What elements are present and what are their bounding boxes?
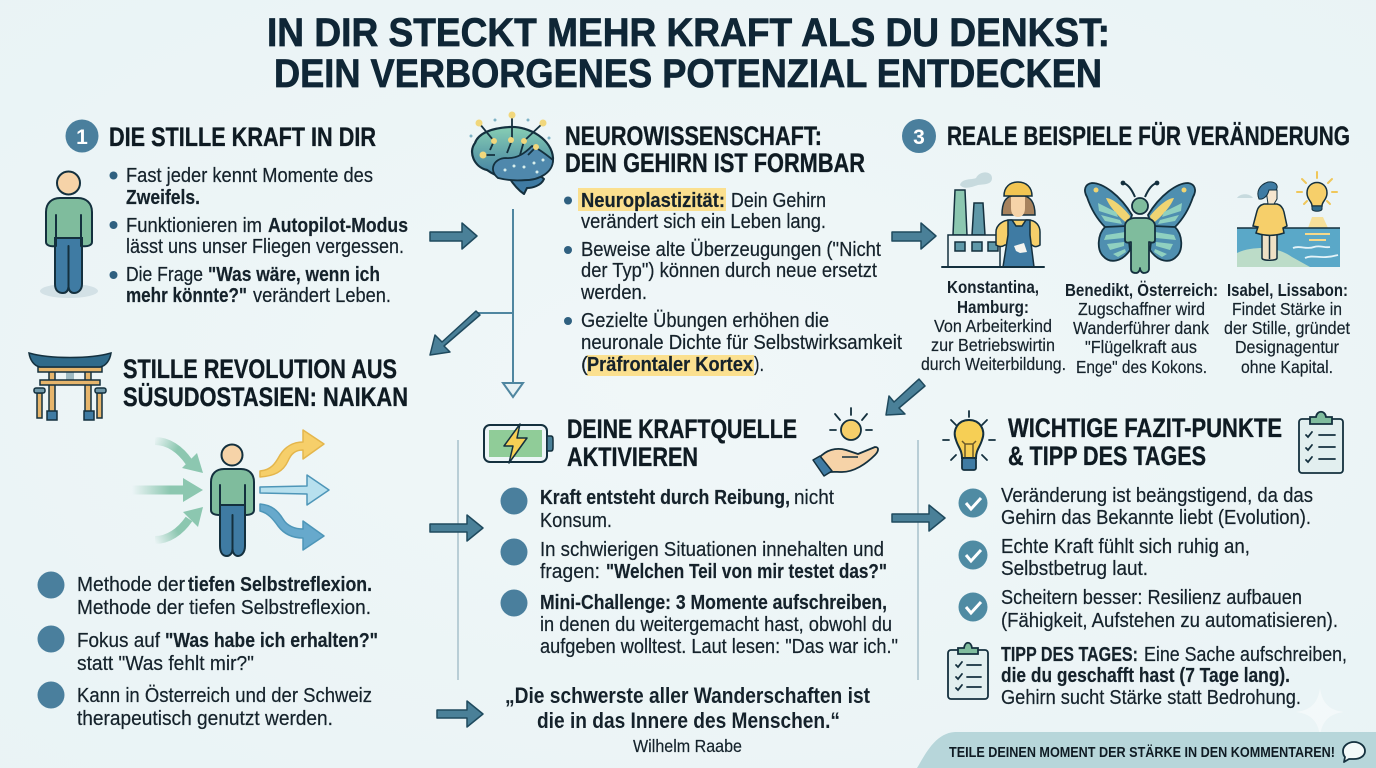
text: benedikt: Enge" des Kokons.	[1076, 357, 1207, 377]
bullet list: kraftquelle: Kraft entsteht durch Reibung,	[540, 486, 790, 509]
icon: brain	[470, 112, 553, 194]
bullet list: stille kraft: lässt uns unser Fliegen vergessen.	[126, 235, 404, 258]
bullet list: stille kraft: Autopilot-Modus	[268, 214, 408, 237]
bullet list: stille kraft: verändert Leben.	[253, 284, 391, 307]
bullet list: neuroplastizitaet: ).	[754, 353, 764, 376]
text: konstantina: zur Betriebswirtin	[931, 335, 1055, 355]
sparkle	[1296, 688, 1344, 736]
arrow: brain down to kraftquelle with branch to naikan	[430, 209, 523, 397]
bullet list: naikan: Methode der	[77, 573, 185, 596]
heading: deine kraftquelle: AKTIVIEREN	[567, 442, 698, 472]
icon: outgoing arrows	[260, 430, 329, 550]
text: tipp des tages: Gehirn sucht Stärke statt Bedrohung.	[1001, 686, 1301, 709]
bullet list: kraftquelle: nicht	[794, 486, 834, 509]
heading: deine kraftquelle	[567, 414, 797, 472]
panel: reale beispiele	[902, 119, 1350, 377]
icon: check 3	[958, 592, 988, 622]
icon: torii gate	[29, 353, 111, 420]
quote: wilhelm raabe	[505, 683, 871, 756]
heading: die stille kraft in dir: DIE STILLE KRAFT IN DIR	[109, 122, 376, 152]
heading: neurowissenschaft: NEUROWISSENSCHAFT:	[565, 121, 822, 151]
text: isabel: Findet Stärke in	[1232, 299, 1342, 319]
bullet list: kraftquelle: Mini-Challenge: 3 Momente aufschreiben,	[540, 591, 887, 614]
bullet list: neuroplastizitaet: der Typ") können durch neue ersetzt	[581, 259, 877, 282]
bullet list: naikan: Kann in Österreich und der Schweiz	[77, 684, 372, 707]
arrow: naikan to kraftquelle	[430, 515, 483, 541]
text: tipp des tages: TIPP DES TAGES:	[1001, 643, 1138, 666]
text: benedikt: Benedikt, Österreich:	[1065, 280, 1218, 300]
text: konstantina: Von Arbeiterkind	[934, 316, 1052, 336]
icon: standing person	[40, 172, 98, 298]
text: isabel: Designagentur	[1235, 337, 1339, 357]
panel: neurowissenschaft	[470, 112, 902, 376]
quote: wilhelm raabe: „Die schwerste aller Wanderschaften ist	[505, 683, 871, 708]
text: fazit points: Selbstbetrug laut.	[1001, 557, 1148, 580]
number badge 3	[902, 119, 936, 153]
bullet list: kraftquelle: "Welchen Teil von mir testet das?"	[606, 560, 887, 583]
bullet list: neuroplastizitaet: neuronale Dichte für Selbstwirksamkeit	[581, 331, 902, 354]
icon: butterfly person	[1085, 182, 1195, 273]
bullet list: naikan: statt "Was fehlt mir?"	[77, 652, 254, 675]
text: isabel: Isabel, Lissabon:	[1227, 280, 1348, 300]
text: fazit points: Gehirn das Bekannte liebt (Evolution).	[1001, 506, 1311, 529]
bullet list: kraftquelle: aufgeben wolltest. Laut lesen: "Das war ich."	[540, 635, 898, 658]
icon: woman by the sea with light bulb	[1237, 172, 1340, 267]
bullet list: naikan	[38, 572, 378, 730]
text: konstantina: durch Weiterbildung.	[921, 354, 1066, 374]
heading: wichtige fazit-punkte: & TIPP DES TAGES	[1008, 441, 1206, 471]
arrow: neurowissenschaft to beispiele	[892, 223, 936, 249]
icon: factory and worker	[942, 172, 1044, 267]
bullet list: stille kraft	[110, 164, 408, 307]
panel: kraftquelle	[484, 408, 898, 756]
arrow: kraftquelle to fazit	[892, 505, 945, 531]
text: benedikt: Zugschaffner wird	[1078, 299, 1205, 319]
icon: speech bubble	[1343, 742, 1365, 762]
text: tipp des tages: die du geschafft hast (7 Tage lang).	[1001, 664, 1290, 687]
heading: stille revolution: STILLE REVOLUTION AUS	[123, 354, 397, 384]
bullet list: kraftquelle: in denen du weitergemacht hast, obwohl du	[540, 613, 892, 636]
number badge 3: 3	[913, 126, 925, 149]
bullet list: neuroplastizitaet: Neuroplastizität:	[581, 189, 725, 212]
icon: battery with lightning	[484, 424, 553, 463]
bullet list: neuroplastizitaet: werden.	[580, 281, 647, 304]
footer band	[917, 732, 1376, 768]
bullet list: neuroplastizitaet: verändert sich ein Leben lang.	[581, 210, 826, 233]
bullet list: stille kraft: Funktionieren im	[126, 214, 262, 237]
bullet list: kraftquelle: In schwierigen Situationen innehalten und	[540, 538, 884, 561]
heading: deine kraftquelle: DEINE KRAFTQUELLE	[567, 414, 797, 444]
title: DEIN VERBORGENES POTENZIAL ENTDECKEN	[274, 52, 1102, 96]
quote: wilhelm raabe: Wilhelm Raabe	[633, 736, 742, 756]
heading: wichtige fazit-punkte	[1008, 413, 1282, 471]
icon: clipboard small	[948, 643, 988, 699]
text: konstantina	[921, 277, 1066, 374]
text: isabel: der Stille, gründet	[1224, 318, 1350, 338]
icon: check 2	[958, 540, 988, 570]
bullet list: kraftquelle: Konsum.	[540, 509, 612, 532]
text: fazit points: Echte Kraft fühlt sich ruhig an,	[1001, 535, 1250, 558]
number badge 1: 1	[76, 126, 88, 149]
heading: wichtige fazit-punkte: WICHTIGE FAZIT-PUNKTE	[1008, 413, 1282, 443]
heading: stille revolution: SÜSUDOSTASIEN: NAIKAN	[123, 382, 408, 412]
bullet list: neuroplastizitaet: Präfrontaler Kortex	[587, 353, 754, 376]
icon: person receiving	[211, 444, 254, 556]
panel: naikan	[29, 353, 408, 730]
bullet list: naikan: therapeutisch genutzt werden.	[77, 707, 333, 730]
panel: fazit	[917, 411, 1376, 768]
heading: neurowissenschaft: DEIN GEHIRN IST FORMBAR	[565, 148, 865, 178]
divider	[458, 440, 918, 680]
bullet list: neuroplastizitaet	[564, 188, 902, 376]
arrow: beispiele to kraftquelle	[886, 379, 925, 415]
icon: light bulb	[943, 411, 995, 470]
bullet list: kraftquelle	[500, 486, 898, 658]
icon: check 1	[958, 488, 988, 518]
title	[267, 11, 1110, 96]
icon: incoming arrows	[132, 441, 203, 540]
text: tipp des tages: Eine Sache aufschreiben,	[1144, 643, 1347, 666]
text: isabel	[1224, 280, 1350, 377]
bullet list: neuroplastizitaet: Gezielte Übungen erhöhen die	[581, 309, 829, 332]
check list: fazit	[958, 484, 1338, 632]
icon: hand holding sun	[813, 408, 878, 476]
panel: die stille kraft	[40, 120, 408, 307]
title: IN DIR STECKT MEHR KRAFT ALS DU DENKST:	[267, 11, 1110, 55]
quote: wilhelm raabe: die in das Innere des Menschen.“	[537, 708, 840, 733]
text: benedikt: "Flügelkraft aus	[1085, 337, 1197, 357]
text: fazit points: (Fähigkeit, Aufstehen zu automatisieren).	[1001, 609, 1338, 632]
text: tipp des tages	[1001, 643, 1347, 709]
bullet list: naikan: Fokus auf	[77, 629, 160, 652]
bullet list: stille kraft: Die Frage	[126, 263, 203, 286]
icon: clipboard	[1299, 412, 1343, 473]
text: konstantina: Hamburg:	[957, 297, 1029, 317]
heading: neurowissenschaft	[565, 121, 865, 178]
arrow: naikan to quote	[437, 701, 483, 727]
bullet list: stille kraft: Fast jeder kennt Momente des	[126, 164, 373, 187]
bullet list: naikan: tiefen Selbstreflexion.	[188, 573, 372, 596]
arrow: stille kraft to neurowissenschaft	[430, 223, 477, 249]
text: benedikt	[1065, 280, 1218, 377]
text: fazit points: Veränderung ist beängstigend, da das	[1001, 484, 1313, 507]
text: konstantina: Konstantina,	[947, 277, 1039, 297]
number badge 1	[66, 120, 98, 152]
bullet list: stille kraft: Zweifels.	[126, 186, 200, 209]
bullet list: neuroplastizitaet: Dein Gehirn	[731, 189, 826, 212]
bullet list: naikan: "Was habe ich erhalten?"	[165, 629, 378, 652]
text: isabel: ohne Kapital.	[1241, 357, 1333, 377]
bullet list: stille kraft: "Was wäre, wenn ich	[208, 263, 380, 286]
text: fazit points	[1001, 484, 1338, 632]
bullet list: neuroplastizitaet: (	[581, 353, 588, 376]
bullet list: kraftquelle: fragen:	[540, 560, 600, 583]
text: benedikt: Wanderführer dank	[1073, 318, 1209, 338]
bullet list: naikan: Methode der tiefen Selbstreflexion.	[77, 596, 371, 619]
bullet list: neuroplastizitaet: Beweise alte Überzeugungen ("Nicht	[581, 238, 881, 261]
heading: stille revolution	[123, 354, 408, 412]
text: fazit points: Scheitern besser: Resilienz aufbauen	[1001, 586, 1302, 609]
bullet list: stille kraft: mehr könnte?"	[126, 284, 247, 307]
